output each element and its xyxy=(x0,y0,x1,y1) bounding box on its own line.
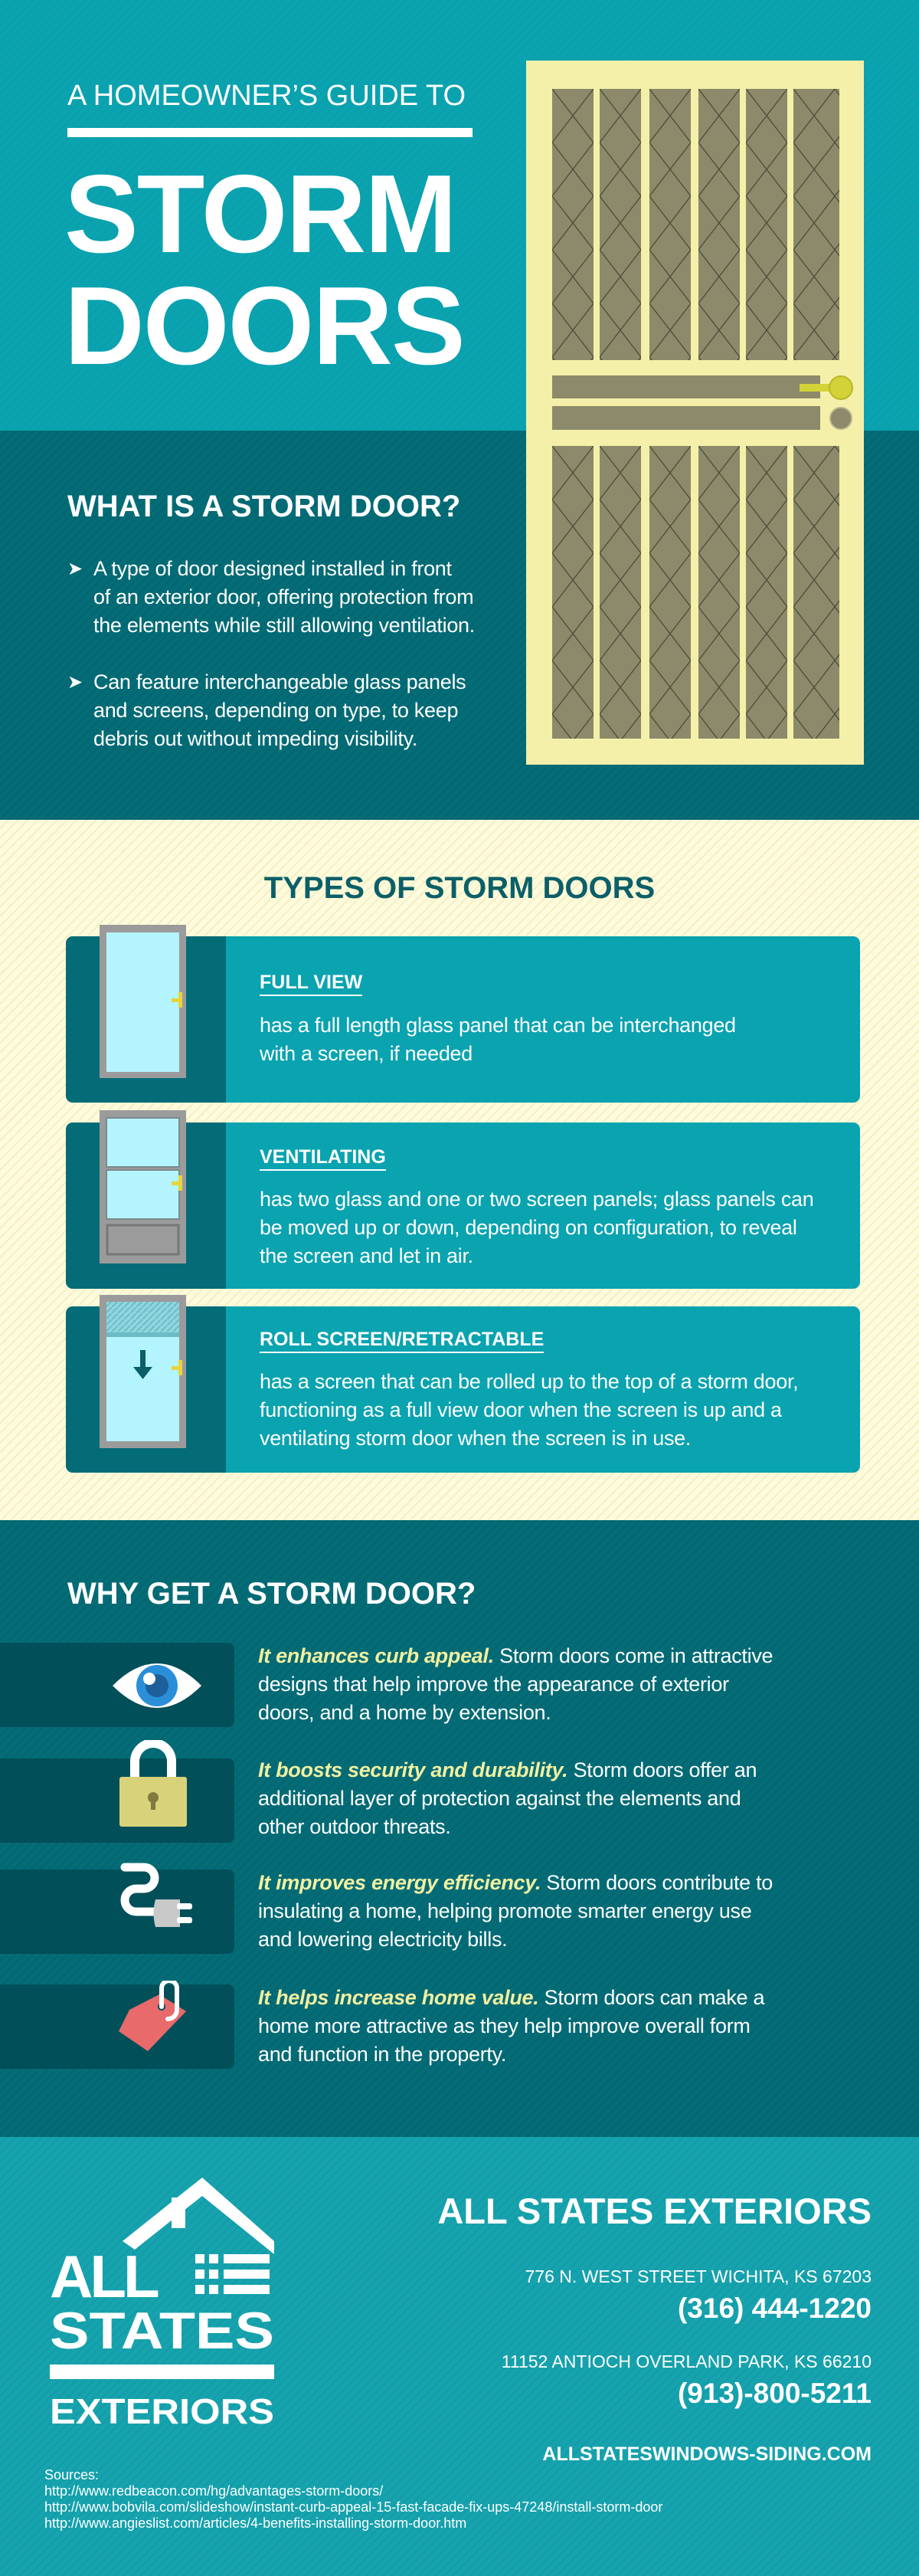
bullet 1: the elements while still allowing ventilation. xyxy=(93,614,475,637)
sources: http://www.angieslist.com/articles/4-benefits-installing-storm-door.htm xyxy=(44,2515,466,2531)
heading: why get a storm door: WHY GET A STORM DOOR? xyxy=(67,1577,476,1611)
heading: what is a storm door: WHAT IS A STORM DOOR? xyxy=(67,490,460,523)
card: ventilating xyxy=(66,1122,860,1289)
bullet 2: Can feature interchangeable glass panels xyxy=(93,670,466,693)
card: roll screen xyxy=(66,1306,860,1473)
text: energy: It improves energy efficiency. Storm doors contribute to xyxy=(258,1871,773,1894)
card text: roll screen: ROLL SCREEN/RETRACTABLE xyxy=(260,1329,544,1350)
card text: full view: FULL VIEW xyxy=(260,972,362,993)
logo: all states exteriors: ALL xyxy=(50,2243,159,2310)
text: curb appeal: doors, and a home by extension. xyxy=(258,1701,551,1724)
bullet 2: and screens, depending on type, to keep xyxy=(93,699,458,722)
icon: plug xyxy=(121,1863,192,1927)
text: ventilating storm door when the screen is in use. xyxy=(260,1427,691,1450)
sources: http://www.bobvila.com/slideshow/instant-curb-appeal-15-fast-facade-fix-ups-47248/install-storm-door xyxy=(44,2499,662,2515)
benefit row: security xyxy=(0,1758,234,1843)
text: energy xyxy=(258,1871,773,1951)
title: STORM DOORS xyxy=(64,152,464,388)
text: energy: and lowering electricity bills. xyxy=(258,1928,507,1951)
text: home value: and function in the property. xyxy=(258,2043,506,2066)
text: with a screen, if needed xyxy=(260,1042,473,1065)
sources: Sources: xyxy=(44,2467,99,2483)
text: home value xyxy=(258,1986,765,2066)
bullet 1: of an exterior door, offering protection from xyxy=(93,585,473,608)
benefit row: home value xyxy=(0,1984,234,2069)
phone 1: (316) 444-1220 xyxy=(678,2293,872,2324)
text: functioning as a full view door when the screen is up and a xyxy=(260,1398,782,1421)
logo: all states exteriors xyxy=(50,2178,274,2427)
icon: price tag xyxy=(119,1981,186,2051)
company name: ALL STATES EXTERIORS xyxy=(437,2191,872,2231)
illustration: storm door xyxy=(526,61,864,765)
title: subheading: A HOMEOWNER’S GUIDE TO xyxy=(67,80,466,112)
bullet 1 xyxy=(67,557,475,637)
text: has two glass and one or two screen panels; glass panels can xyxy=(260,1188,813,1211)
address 2: 11152 ANTIOCH OVERLAND PARK, KS 66210 xyxy=(502,2352,872,2371)
footer contact block xyxy=(437,2191,872,2465)
text: curb appeal xyxy=(258,1644,773,1724)
text: has a full length glass panel that can be interchanged xyxy=(260,1014,736,1037)
text: the screen and let in air. xyxy=(260,1244,473,1267)
bullet 2: ➤ xyxy=(67,672,83,693)
card: full view xyxy=(66,936,860,1103)
text: has a screen that can be rolled up to the top of a storm door, xyxy=(260,1370,798,1393)
text: energy: insulating a home, helping promote smarter energy use xyxy=(258,1899,751,1922)
sources xyxy=(44,2467,663,2531)
text: curb appeal: It enhances curb appeal. Storm doors come in attractive xyxy=(258,1644,773,1667)
card text: ventilating: VENTILATING xyxy=(260,1146,386,1168)
address 1: 776 N. WEST STREET WICHITA, KS 67203 xyxy=(525,2266,872,2286)
logo: all states exteriors: STATES xyxy=(50,2302,274,2360)
bullet 2 xyxy=(67,670,466,750)
phone 2: (913)-800-5211 xyxy=(678,2378,872,2409)
website: ALLSTATESWINDOWS-SIDING.COM xyxy=(542,2443,872,2465)
title: STORM DOORS: STORM xyxy=(64,152,456,276)
title: STORM DOORS: DOORS xyxy=(64,264,464,388)
sources: http://www.redbeacon.com/hg/advantages-storm-doors/ xyxy=(44,2483,383,2499)
heading: types of storm doors: TYPES OF STORM DOORS xyxy=(264,871,655,905)
bullet 1: ➤ xyxy=(67,559,83,579)
text: security: It boosts security and durability. Storm doors offer an xyxy=(258,1758,757,1781)
text: home value: It helps increase home value. Storm doors can make a xyxy=(258,1986,764,2009)
icon: eye xyxy=(113,1663,201,1708)
text: security: additional layer of protection against the elements and xyxy=(258,1787,741,1810)
title underline bar xyxy=(67,128,473,137)
icon: roll screen door xyxy=(100,1295,186,1448)
icon: ventilating door xyxy=(100,1110,186,1263)
icon: padlock xyxy=(119,1740,187,1827)
text: curb appeal: designs that help improve the appearance of exterior xyxy=(258,1673,729,1696)
icon: full view door xyxy=(100,925,186,1078)
text: home value: home more attractive as they help improve overall form xyxy=(258,2014,751,2037)
bullet list: definition xyxy=(67,557,475,750)
benefit row: energy xyxy=(0,1870,234,1954)
bullet 2: debris out without impeding visibility. xyxy=(93,727,417,750)
text: be moved up or down, depending on configuration, to reveal xyxy=(260,1216,797,1239)
text: security: other outdoor threats. xyxy=(258,1815,451,1838)
text: security xyxy=(258,1758,757,1838)
bullet 1: A type of door designed installed in front xyxy=(93,557,452,580)
benefit row: curb appeal xyxy=(0,1643,234,1727)
